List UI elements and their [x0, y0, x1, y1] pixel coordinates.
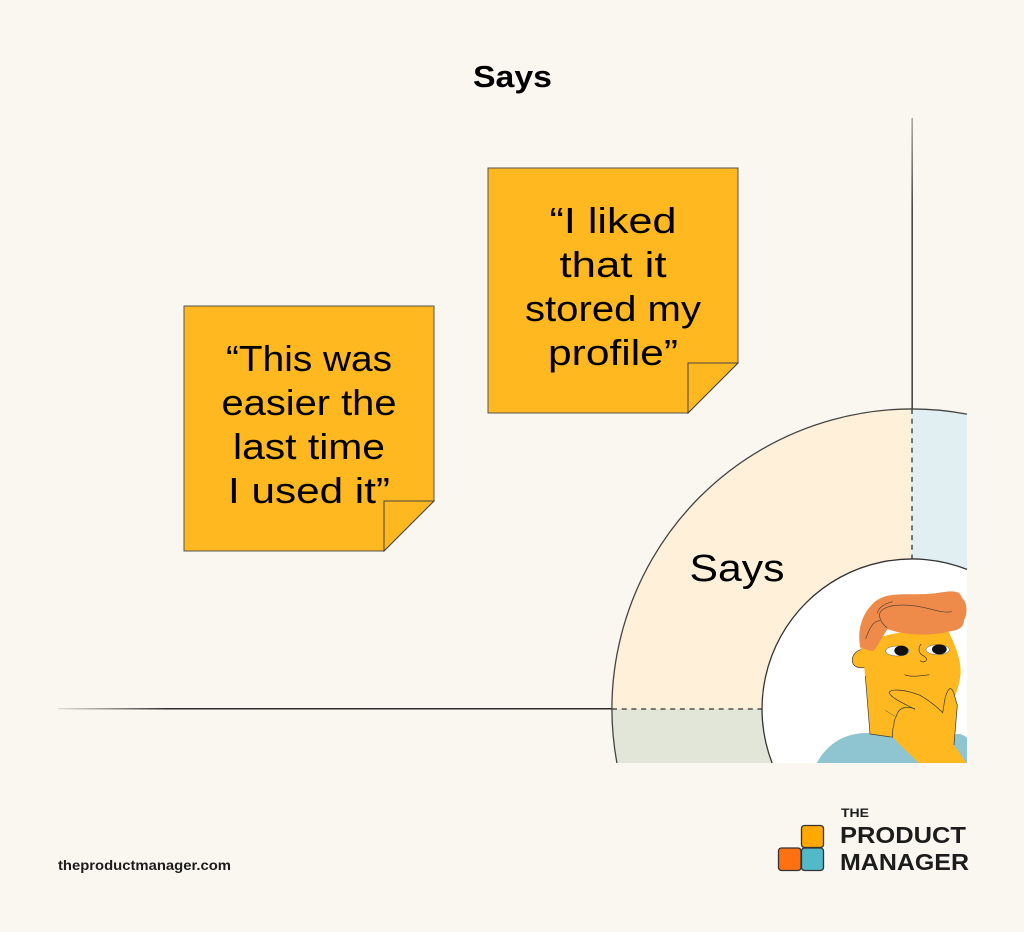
body — [817, 733, 970, 763]
logo wordmark: MANAGER — [840, 849, 969, 875]
empathy map quadrant diagram — [612, 409, 970, 763]
logo wordmark: PRODUCT — [840, 822, 966, 848]
hair strands — [866, 602, 952, 639]
logo wordmark: THE — [841, 806, 869, 820]
dashed dividers — [612, 409, 912, 709]
axis: horizontal line — [58, 708, 612, 710]
title: Says — [473, 59, 552, 94]
center circle — [762, 559, 967, 763]
website url: theproductmanager.com — [58, 857, 231, 873]
ear — [852, 649, 864, 668]
logo wordmark — [840, 806, 969, 875]
ring outline — [612, 409, 967, 763]
mouth — [905, 675, 929, 676]
ring: says segment — [612, 409, 912, 709]
label: says: Says — [690, 548, 784, 590]
sticky note: I liked that it stored my profile: “I liked — [550, 200, 676, 241]
logo icon: blocks — [778, 826, 824, 870]
sticky note: I liked that it stored my profile: profile” — [548, 332, 678, 373]
eyes — [886, 646, 909, 656]
sticky note: I liked that it stored my profile — [488, 168, 738, 413]
ring: thinks segment — [912, 409, 967, 709]
sticky note: This was easier the last time I used it: easier the — [222, 382, 396, 423]
sticky note: This was easier the last time I used it: “This was — [226, 338, 392, 379]
hair — [859, 591, 966, 651]
axis: vertical line — [912, 118, 913, 409]
center circle outline — [762, 559, 967, 763]
icon: thinking man — [817, 591, 970, 763]
face and neck — [860, 628, 961, 745]
logo — [778, 806, 969, 875]
nose — [919, 644, 927, 662]
sticky note: This was easier the last time I used it — [184, 306, 434, 551]
hand — [892, 697, 966, 763]
sticky note: This was easier the last time I used it: last time — [233, 426, 385, 467]
sticky note: I liked that it stored my profile: that it — [560, 244, 666, 285]
sticky note: This was easier the last time I used it: I used it” — [228, 470, 390, 511]
ring: does segment — [612, 709, 912, 763]
sticky note: I liked that it stored my profile: stored my — [525, 288, 702, 329]
